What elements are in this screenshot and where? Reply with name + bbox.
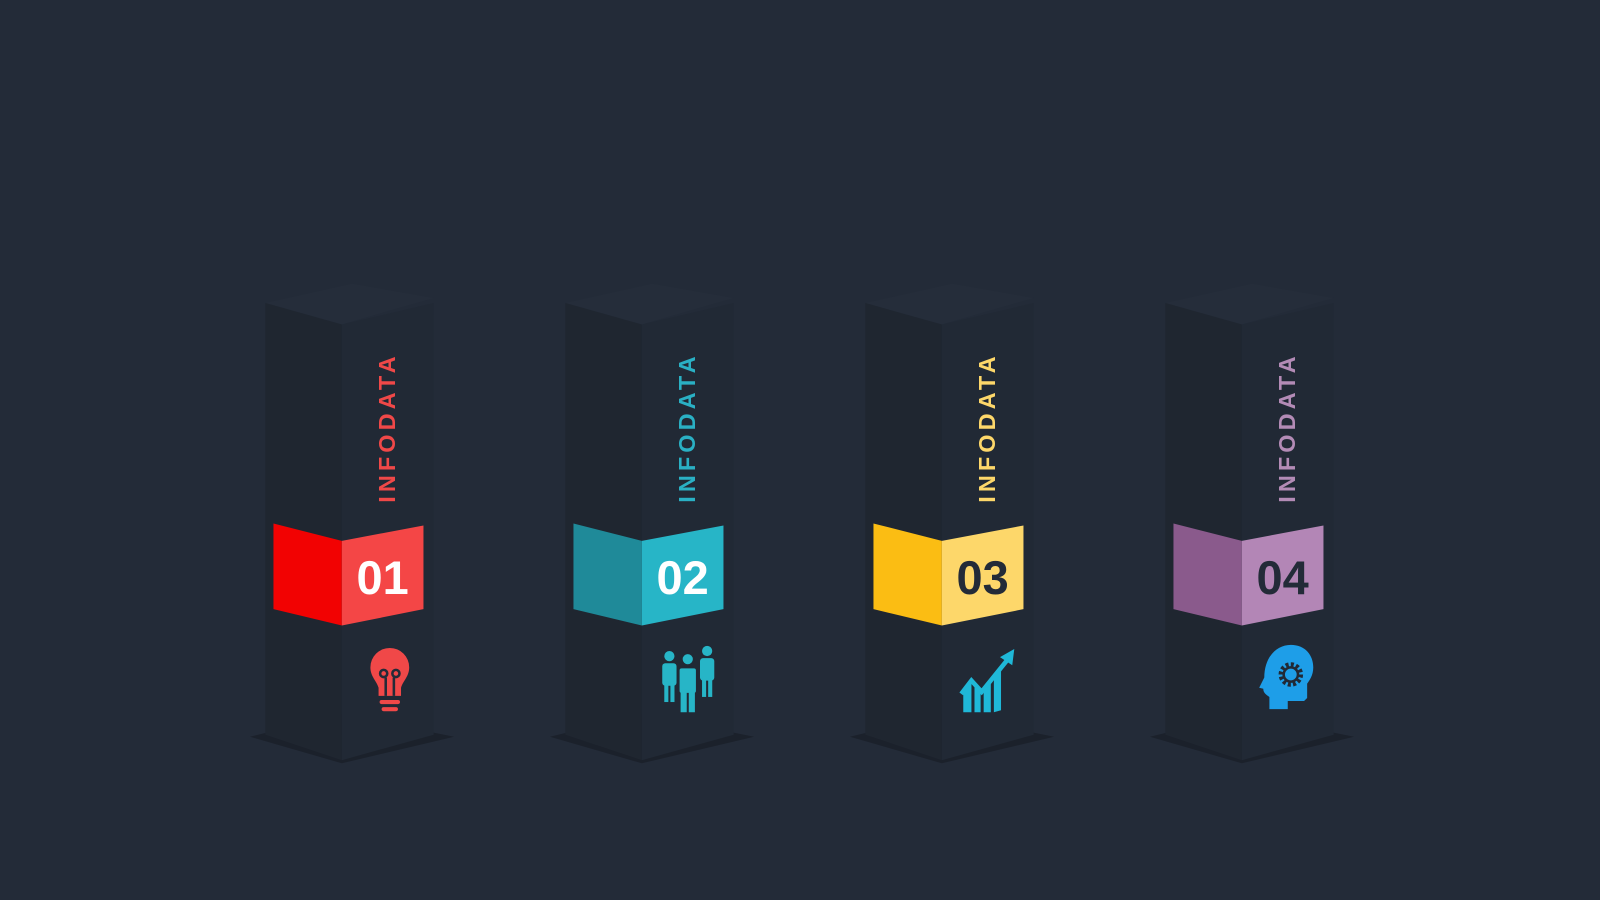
label INFODATA: INFODATA [1274, 352, 1300, 503]
icon: people [662, 646, 714, 712]
pillar 2 [550, 284, 754, 763]
pillar 4 [1150, 284, 1354, 763]
number 02: 02 [657, 552, 709, 604]
icon: growth chart [961, 649, 1014, 712]
number 04: 04 [1257, 552, 1309, 604]
icon: light bulb [370, 648, 409, 711]
pillar 1 [250, 284, 454, 763]
label INFODATA: INFODATA [674, 352, 700, 503]
band 04 [1173, 523, 1323, 626]
number 03: 03 [957, 552, 1009, 604]
icon: head with gear [1259, 645, 1313, 709]
pillar 3 [850, 284, 1054, 763]
band 01 [273, 523, 423, 626]
label INFODATA: INFODATA [374, 352, 400, 503]
band 02 [573, 523, 723, 626]
number 01: 01 [357, 552, 409, 604]
band 03 [873, 523, 1023, 626]
label INFODATA: INFODATA [974, 352, 1000, 503]
